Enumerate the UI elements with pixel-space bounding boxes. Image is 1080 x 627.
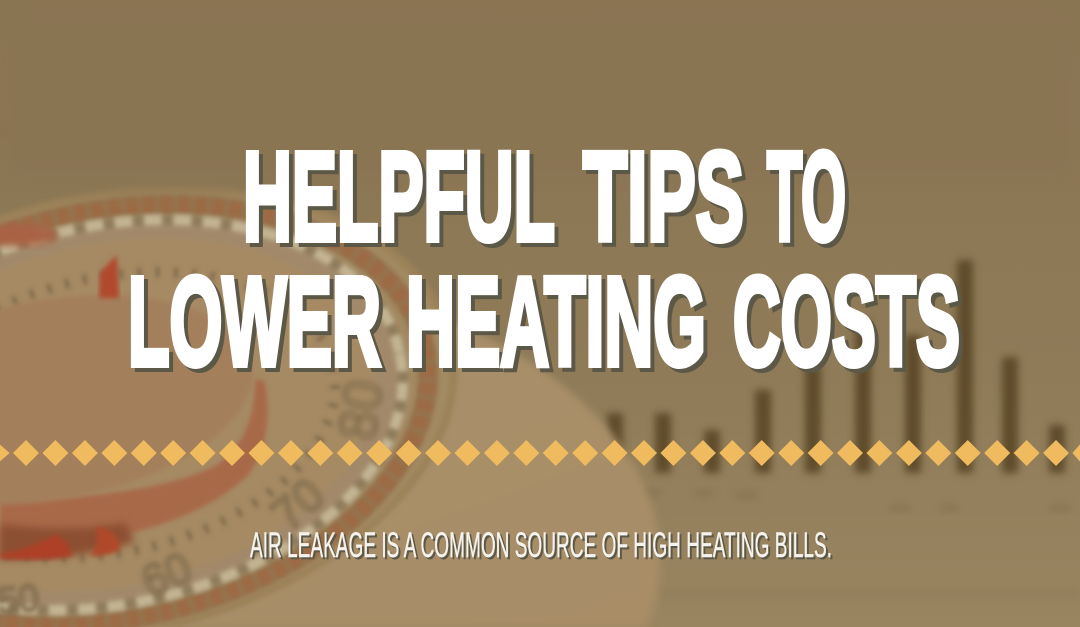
temperature numerals on the dial: 60	[135, 543, 198, 607]
title: TO	[767, 126, 846, 267]
title: HELPFUL	[243, 126, 555, 267]
central dial disc	[0, 297, 251, 506]
temperature numerals on the dial: 80	[327, 376, 395, 444]
red glow at upper left of dial	[0, 224, 58, 246]
divider: row of gold diamonds	[0, 440, 1080, 466]
bar chart in the background	[607, 260, 1065, 473]
title: LOWER	[128, 251, 381, 392]
temperature numerals on the dial: 70	[261, 468, 334, 540]
title: HEATING	[406, 251, 706, 392]
top fade	[0, 0, 1080, 185]
title: TIPS	[583, 126, 744, 267]
red arrow indicator	[99, 255, 119, 298]
thermostat body	[194, 322, 660, 626]
red rim under dial	[0, 380, 268, 556]
title	[128, 126, 960, 392]
background: blurred paper with thermostat and bar chart photo	[0, 190, 1080, 627]
temperature numerals on the dial	[0, 376, 395, 623]
thermostat dial	[0, 186, 458, 627]
